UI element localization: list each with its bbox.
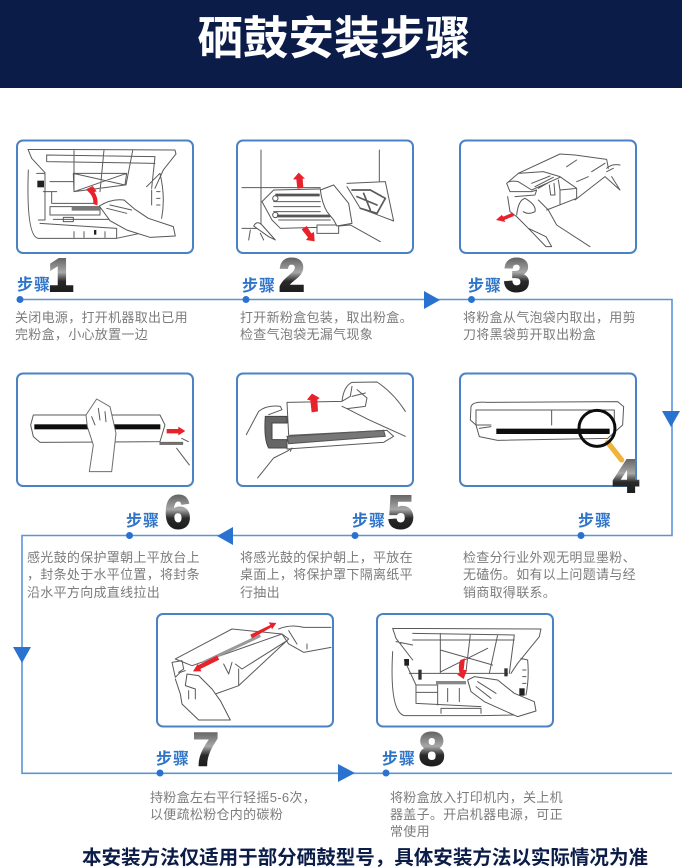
step 6 text (27, 550, 200, 600)
arrow: left side down (13, 647, 31, 663)
step 1 text (15, 310, 188, 342)
step 8 text: 将粉盒放入打印机内，关上机 (390, 790, 563, 805)
arrow: red down (302, 226, 315, 241)
arrow: step 7 to 8 (338, 764, 355, 782)
panel: step 7 (157, 614, 333, 726)
step 7 label: 步骤 (156, 749, 190, 768)
panel: step 3 (460, 140, 636, 253)
arrow: step 6 from 5 (217, 527, 233, 545)
step 8 label (382, 723, 445, 776)
arrow: red curved down (457, 658, 467, 679)
step 5 text: 行抽出 (240, 585, 280, 600)
arrow: red forward (250, 622, 276, 638)
step 3 label: 3 (504, 249, 530, 301)
step 4 label: 步骤 (578, 511, 612, 530)
step 4 number: 4 (613, 450, 639, 502)
step 4 text: 无磕伤。如有以上问题请与经 (463, 567, 636, 582)
step 3 label (468, 249, 530, 303)
step 5 text: 桌面上，将保护罩下隔离纸平 (240, 567, 413, 582)
step 5 label: 步骤 (352, 511, 386, 530)
step 2 label: 2 (279, 249, 305, 301)
panel: step 4 (460, 374, 636, 486)
step 3 text: 将粉盒从气泡袋内取出，用剪 (463, 310, 636, 325)
step 1 label: 1 (48, 249, 74, 301)
title: 硒鼓安装步骤 (197, 13, 471, 64)
arrow: red up (293, 173, 305, 189)
illustration: opening printer (28, 149, 176, 238)
step 7 text (150, 790, 316, 822)
step 1 text: 关闭电源，打开机器取出已用 (15, 310, 188, 325)
step 3 label: 步骤 (468, 276, 502, 295)
step 2 label (242, 249, 305, 303)
illustration: shaking cartridge (172, 622, 331, 720)
panel: step 1 (17, 140, 193, 253)
step 4 text: 销商取得联系。 (463, 585, 556, 600)
illustration: installing cartridge (392, 628, 541, 717)
step 2 text (240, 310, 413, 342)
panel: step 5 (237, 374, 413, 486)
step 8 text: 器盖子。开启机器电源，可正 (390, 807, 563, 822)
step 2 label: 步骤 (242, 276, 276, 295)
step 6 text: ，封条处于水平位置，将封条 (27, 567, 200, 582)
illustration: unpacking (242, 150, 394, 242)
icon: magnifier (579, 410, 622, 460)
illustration: cutting bag (496, 154, 620, 247)
step 6 label (126, 486, 191, 539)
arrow: step 2 to 3 (424, 291, 440, 309)
step 7 label: 7 (193, 723, 219, 775)
step 5 label (352, 486, 414, 539)
arrow: right side down (662, 411, 680, 427)
step 7 text: 以便疏松粉仓内的碳粉 (150, 807, 283, 822)
arrow: red up (307, 394, 320, 412)
panel: step 6 (17, 374, 193, 486)
step 8 label: 8 (419, 723, 445, 775)
step 4 label (578, 511, 612, 539)
step 1 label (16, 249, 74, 303)
step 5 label: 5 (388, 486, 414, 538)
step 8 text (390, 790, 563, 839)
arrow: red back (193, 656, 219, 671)
header banner (0, 0, 682, 88)
illustration: pulling seal (31, 399, 189, 472)
step 7 text: 持粉盒左右平行轻摇5-6次， (150, 790, 316, 805)
step 4 text: 检查分行业外观无明显墨粉、 (463, 550, 636, 565)
step 6 text: 感光鼓的保护罩朝上平放台上 (27, 550, 200, 565)
step 8 label: 步骤 (382, 749, 416, 768)
step 1 text: 完粉盒，小心放置一边 (15, 327, 148, 342)
panel: step 8 (377, 614, 553, 726)
panel: step 2 (237, 140, 413, 253)
flow line (20, 300, 672, 773)
step 4 text (463, 550, 636, 600)
step 6 label: 6 (165, 486, 191, 538)
step 3 text (463, 310, 636, 342)
illustration: removing paper (246, 382, 405, 478)
step 8 text: 常使用 (390, 824, 430, 839)
arrow: red pull (167, 427, 185, 435)
step 6 label: 步骤 (126, 511, 160, 530)
step 3 text: 刀将黑袋剪开取出粉盒 (463, 327, 596, 342)
step 6 text: 沿水平方向成直线拉出 (27, 585, 160, 600)
step 2 text: 打开新粉盒包装，取出粉盒。 (240, 310, 413, 325)
step 5 text: 将感光鼓的保护朝上，平放在 (240, 550, 413, 565)
arrow: red pull (496, 213, 514, 222)
illustration: drum inspection (470, 402, 624, 460)
step 5 text (240, 550, 413, 600)
arrow: red lift (86, 186, 98, 205)
step 2 text: 检查气泡袋无漏气现象 (240, 327, 373, 342)
step 1 label: 步骤 (17, 275, 51, 294)
step 7 label (156, 723, 219, 776)
